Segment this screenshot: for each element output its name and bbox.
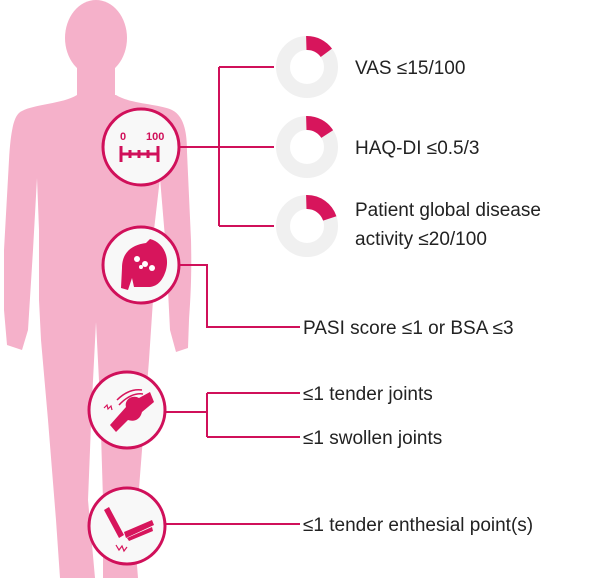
- labels: activity ≤20/100: [355, 229, 487, 250]
- labels: ≤1 tender enthesial point(s): [303, 515, 533, 536]
- donut: VAS: [283, 43, 331, 91]
- icon: elbow enthesis circle: [89, 488, 165, 564]
- body silhouette: [4, 0, 191, 578]
- icon: skin/psoriasis circle: [103, 227, 179, 303]
- icon: VAS scale circle: 100: [146, 131, 164, 143]
- labels: VAS ≤15/100: [355, 58, 465, 79]
- labels: ≤1 swollen joints: [303, 428, 442, 449]
- icon: knee joint circle: [89, 372, 165, 448]
- labels: Patient global disease: [355, 200, 541, 221]
- connector lines: [166, 67, 300, 524]
- labels: ≤1 tender joints: [303, 384, 433, 405]
- labels: [303, 58, 541, 536]
- labels: HAQ-DI ≤0.5/3: [355, 138, 479, 159]
- donut: patient global: [283, 202, 331, 250]
- donut: HAQ-DI: [283, 123, 331, 171]
- icon: VAS scale circle: [103, 109, 179, 185]
- labels: PASI score ≤1 or BSA ≤3: [303, 318, 514, 339]
- icon: VAS scale circle: 0: [120, 131, 126, 143]
